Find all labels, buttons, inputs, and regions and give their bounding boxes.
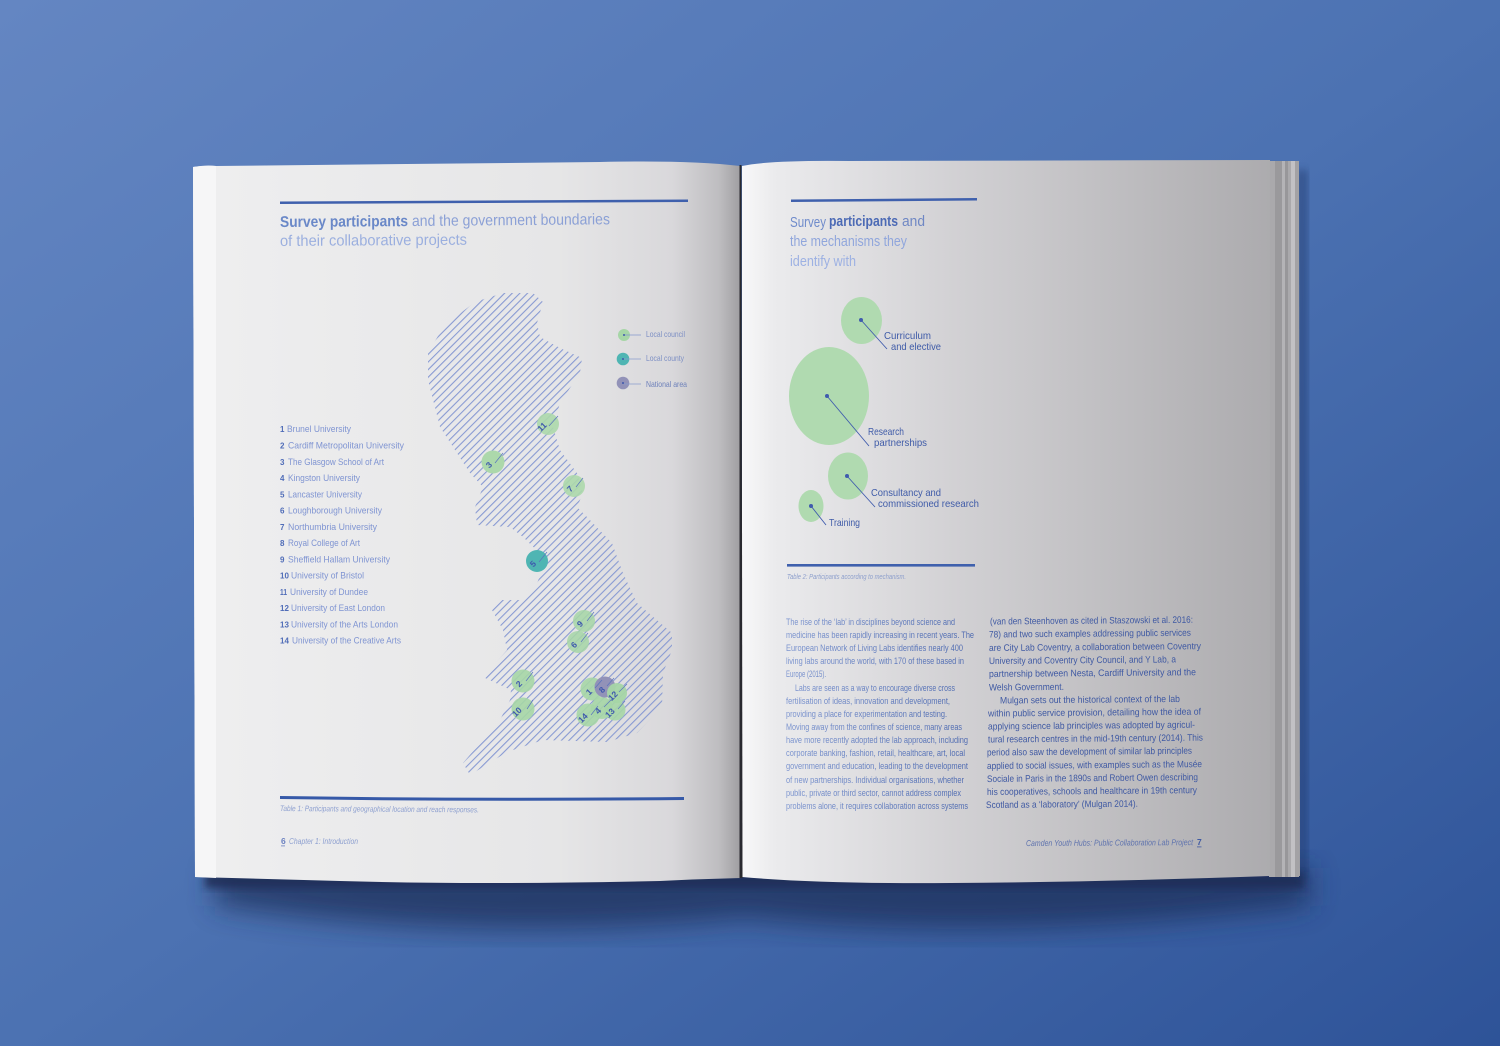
panel: left page [193, 162, 741, 883]
map: 9 [575, 618, 585, 629]
body text column 1: corporate banking, fashion, retail, healthcare, art, local [786, 747, 965, 758]
body text column 1: European Network of Living Labs identifies nearly 400 [786, 642, 963, 653]
body text column 2: tural research centres in the mid-19th century (2014). This [988, 732, 1203, 744]
body text column 2: are City Lab Coventry, a collaboration between Coventry [989, 640, 1201, 653]
bubble: research partnerships: partnerships [874, 437, 927, 449]
right bottom rule [787, 564, 975, 567]
body text column 2: Sociale in Paris in the 1890s and Robert Owen describing [987, 771, 1198, 784]
body text column 2: 78) and two such examples addressing public services [989, 627, 1191, 639]
body text column 1: medicine has been rapidly increasing in recent years. The [786, 629, 974, 640]
university list: 8 [280, 539, 285, 548]
university list: 14 [280, 636, 289, 646]
map leader lines and numbers [495, 416, 627, 715]
body text column 1: public, private or third sector, cannot address complex [786, 787, 961, 798]
left title: of their collaborative projects [280, 232, 467, 250]
university list: University of Dundee [290, 587, 368, 598]
body text column 1: have more recently adopted the lab approach, including [786, 734, 968, 745]
book shadow [205, 170, 1310, 929]
left title [280, 211, 610, 250]
left title: Survey participants [280, 213, 408, 231]
map: 14 [576, 711, 590, 725]
map: 10 [510, 705, 524, 719]
body text column 2: within public service provision, detailing how the idea of [987, 706, 1201, 719]
body text column 1: Europe (2015). [786, 668, 826, 679]
map: 4 [593, 705, 603, 716]
map circles [482, 413, 627, 726]
university list: 4 [280, 474, 285, 483]
university list: University of the Creative Arts [292, 636, 401, 646]
right title: identify with [790, 253, 856, 270]
university list: 11 [280, 588, 287, 597]
right top rule [791, 198, 977, 202]
university list: University of East London [291, 603, 385, 614]
university list: Lancaster University [288, 490, 362, 500]
body text column 1: Labs are seen as a way to encourage diverse cross [795, 682, 955, 693]
body text column 2: University and Coventry City Council, and Y Lab, a [989, 653, 1177, 666]
body text column 2: Welsh Government. [989, 681, 1064, 692]
body text column 2: Mulgan sets out the historical context of the lab [1000, 693, 1180, 705]
map: 7 [565, 483, 575, 494]
bubble: curriculum and elective: and elective [891, 341, 941, 353]
bubble chart: mechanisms [789, 297, 979, 529]
left title: and the government boundaries [412, 211, 610, 230]
map legend: National area [646, 379, 687, 389]
body text column 2: (van den Steenhoven as cited in Staszowski et al. 2016: [990, 614, 1193, 626]
left footer: 6 [281, 836, 286, 846]
university list: Loughborough University [288, 506, 382, 516]
bubble: training: Training [829, 517, 860, 529]
university list [280, 424, 404, 646]
university list: 10 [280, 572, 289, 580]
body text column 1: government and education, leading to the development [786, 760, 968, 771]
body text column 2: partnership between Nesta, Cardiff University and the [989, 666, 1196, 679]
body text column 2: applying science lab principles was adopted by agricul- [988, 719, 1195, 731]
hatched UK landmass [428, 293, 672, 775]
map: 12 [606, 689, 620, 703]
right title: and [902, 213, 925, 230]
body text column 1: Moving away from the confines of science, many areas [786, 721, 962, 732]
university list: Northumbria University [288, 522, 377, 533]
bubble: curriculum and elective [841, 297, 941, 353]
body text column 1: living labs around the world, with 170 of these based in [786, 655, 964, 666]
body text column 2: his cooperatives, schools and healthcare in 19th century [987, 784, 1197, 797]
body text column 1: providing a place for experimentation and testing. [786, 708, 947, 719]
university list: The Glasgow School of Art [288, 457, 384, 468]
university list: 13 [280, 620, 289, 630]
map [428, 293, 672, 775]
right footer: 7 [1197, 837, 1202, 847]
university list: University of Bristol [291, 570, 364, 582]
panel: right page [742, 160, 1270, 883]
map legend: Local council [646, 329, 685, 339]
body text column 1: The rise of the ‘lab’ in disciplines beyond science and [786, 616, 955, 627]
body text column 1: of new partnerships. Individual organisations, whether [786, 774, 964, 785]
university list: Kingston University [288, 473, 360, 484]
right title: the mechanisms they [790, 233, 907, 250]
spine gutter [740, 165, 742, 878]
left footer: Chapter 1: Introduction [289, 836, 358, 846]
map legend [617, 329, 687, 389]
right title: Survey [790, 214, 826, 231]
university list: 1 [280, 425, 285, 434]
bubble: consultancy and commissioned research [828, 452, 979, 510]
body text column 2: applied to social issues, with examples such as the Musée [987, 758, 1202, 771]
body text column 2: Scotland as a ‘laboratory’ (Mulgan 2014). [986, 798, 1138, 810]
university list: Cardiff Metropolitan University [288, 440, 404, 452]
body text column 2 [986, 614, 1203, 810]
map: 6 [569, 639, 579, 650]
map: 1 [584, 686, 594, 697]
bubble: consultancy and commissioned research: commissioned research [878, 498, 979, 510]
university list: 9 [280, 556, 285, 564]
body text column 1: fertilisation of ideas, innovation and development, [786, 695, 950, 706]
university list: University of the Arts London [291, 620, 398, 630]
right footer: Camden Youth Hubs: Public Collaboration Lab Project [1026, 837, 1194, 848]
left top rule [280, 200, 688, 204]
body text column 1 [786, 616, 974, 811]
university list: Sheffield Hallam University [288, 554, 390, 566]
right caption: Table 2: Participants according to mechanism. [787, 572, 906, 581]
bubble: training [798, 490, 860, 529]
bubble: curriculum and elective: Curriculum [884, 330, 931, 342]
university list: 3 [280, 458, 285, 467]
university list: 5 [280, 490, 285, 500]
bubble: consultancy and commissioned research: Consultancy and [871, 487, 941, 499]
book [193, 160, 1300, 883]
map: 8 [597, 684, 607, 695]
right title: participants [829, 213, 898, 230]
map: 13 [603, 706, 617, 720]
university list: 6 [280, 506, 285, 516]
university list: Brunel University [287, 424, 351, 435]
map: 2 [514, 678, 524, 689]
bubble: research partnerships [789, 347, 927, 449]
page edge stack [1268, 161, 1300, 877]
map: 11 [535, 420, 549, 434]
left bottom rule [280, 796, 684, 801]
university list: 7 [280, 523, 285, 532]
right title [790, 213, 925, 270]
left caption: Table 1: Participants and geographical location and reach responses. [280, 804, 479, 814]
body text column 2: period also saw the development of similar lab principles [987, 745, 1192, 757]
university list: Royal College of Art [288, 538, 360, 549]
map: 3 [484, 459, 494, 470]
body text column 1: problems alone, it requires collaboration across systems [786, 800, 968, 811]
map: 5 [528, 558, 538, 569]
map legend: Local county [646, 353, 685, 363]
university list: 2 [280, 442, 285, 450]
bubble: research partnerships: Research [868, 426, 904, 438]
university list: 12 [280, 604, 289, 613]
